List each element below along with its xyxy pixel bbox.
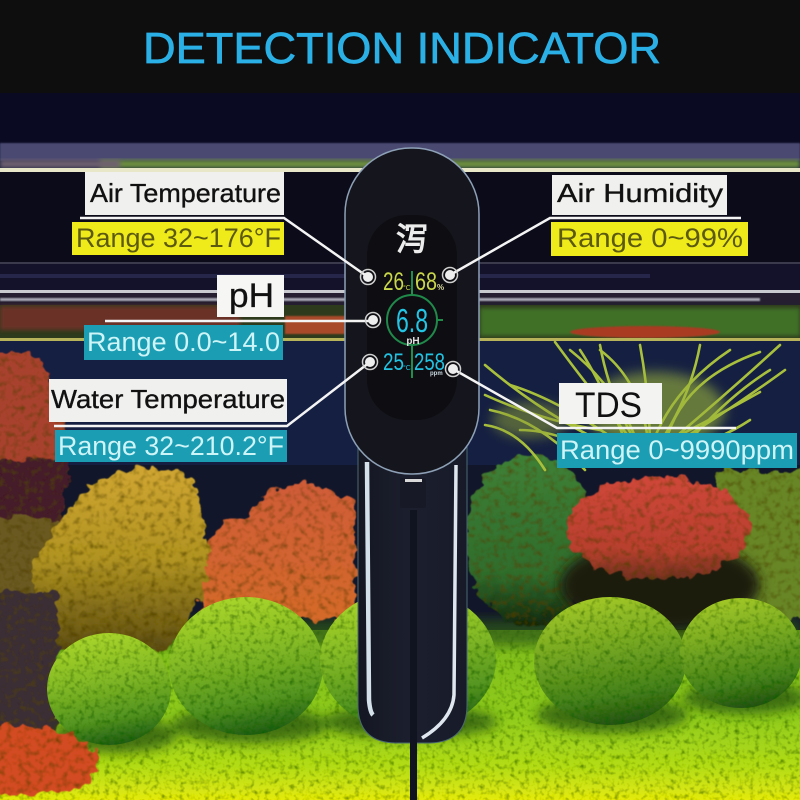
left red plant [0,350,66,540]
humidity reading: 68 [415,268,437,296]
device [345,148,479,800]
range [72,222,284,255]
dark plum plant [0,460,70,540]
callout: TDS [446,362,797,468]
callout: air humidity: Range 0~99% [557,223,743,253]
callout: water temperature [49,354,378,462]
yellow-green grass plant [485,342,785,470]
upper pill [345,148,479,474]
callout: pH [84,275,380,360]
label [85,172,284,215]
callout: pH: Range 0.0~14.0 [87,327,280,357]
leader line [80,218,368,277]
callout: air temperature: Air Temperature [90,178,281,208]
callout: TDS: Range 0~9990ppm [560,435,794,465]
display: °C [403,284,411,292]
right olive plant [715,470,800,620]
callout: water temperature: Range 32~210.2°F [58,431,284,461]
yellow tall plant [30,468,208,650]
ball shadows [53,682,800,753]
red bush right [566,476,750,580]
air temperature reading: 26 [383,268,404,296]
ground shade [0,620,800,646]
callout: air humidity: Air Humidity [557,178,723,208]
callout: pH: pH [229,277,274,315]
pH ring [387,295,437,345]
olive plant lower left [0,515,85,615]
dark shade under red plant [560,540,760,630]
title: DETECTION INDICATOR [143,24,661,73]
TDS reading: 258 [414,349,445,376]
header band [0,0,800,93]
dark green bushy plant [466,454,594,626]
readout divider [411,271,413,378]
pH value: 6.8 [396,302,428,339]
callout: air temperature [72,172,376,284]
grass glow [585,372,725,448]
lower body [358,440,467,800]
display: °C [403,364,411,372]
water temperature reading: 25 [383,349,404,376]
orange plant [200,484,355,620]
display: ppm [430,371,443,377]
logo: 泻 [396,221,428,257]
callout: air humidity [442,175,748,282]
red plant bottom-left [0,725,97,795]
display: % [437,283,444,292]
dark left foliage [0,592,58,730]
sensor dot [363,272,373,282]
callout: TDS: TDS [575,386,642,425]
moss balls [47,633,171,745]
pH unit: pH [406,336,420,347]
callout: water temperature: Water Temperature [51,384,285,414]
ground [0,630,800,800]
display [367,215,457,420]
callout: air temperature: Range 32~176°F [76,223,281,253]
